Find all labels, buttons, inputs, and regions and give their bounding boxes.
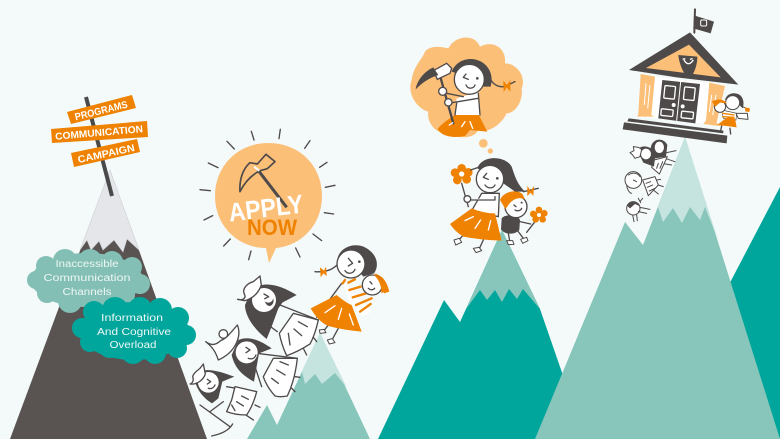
small girl top — [651, 140, 676, 165]
girl 1 — [238, 276, 318, 356]
mountain: small light teal — [247, 333, 370, 439]
cloud: inaccessible communication channels — [27, 249, 150, 313]
thought bubble — [410, 37, 523, 154]
apply now sun bubble: NOW — [247, 215, 297, 240]
girl 2 — [206, 325, 300, 397]
small climbing girls at school — [625, 140, 676, 222]
legs — [458, 232, 524, 249]
girl with doll and flowers — [450, 158, 548, 253]
doll head — [505, 196, 527, 218]
flag — [693, 9, 714, 33]
apply now sun bubble — [200, 129, 335, 263]
door — [658, 80, 700, 123]
girl 3 with pickaxe — [190, 364, 260, 436]
body — [472, 193, 499, 217]
small girl second with hat — [630, 146, 667, 174]
sign: campaign: CAMPAIGN — [77, 143, 136, 166]
small girl bottom — [627, 198, 650, 222]
cloud: inaccessible communication channels: Channels — [62, 287, 112, 298]
doll body — [501, 215, 520, 234]
cloud: information and cognitive overload: And Cognitive — [97, 327, 172, 338]
thought dots — [479, 139, 488, 148]
orange girl with doll at school — [712, 93, 750, 134]
cloud: inaccessible communication channels: Communication — [44, 273, 130, 284]
icon: pickaxe — [240, 154, 287, 207]
columns — [637, 74, 655, 117]
flower left — [451, 164, 473, 207]
girl with pickaxe — [416, 59, 515, 137]
mountain: tall light teal — [535, 137, 780, 439]
orange girl with doll — [311, 245, 389, 344]
sign: programs: PROGRAMS — [74, 100, 129, 123]
school building — [623, 9, 738, 143]
small girl middle — [625, 172, 663, 196]
shield — [678, 55, 697, 79]
steps — [627, 118, 723, 133]
mountain: right background teal — [700, 187, 780, 439]
skirt — [450, 208, 502, 241]
cloud: information and cognitive overload: Overload — [110, 340, 156, 351]
head — [477, 158, 525, 192]
sun rays — [200, 129, 335, 260]
cloud: information and cognitive overload — [72, 297, 196, 364]
flower right — [530, 207, 548, 223]
sign: communication: COMMUNICATION — [55, 124, 143, 143]
sign post with three signs — [51, 95, 148, 196]
bubble — [215, 143, 322, 263]
blob — [410, 37, 523, 137]
text: apply now: APPLY — [227, 189, 305, 228]
roof — [629, 32, 738, 85]
mountain: dark with snow — [10, 170, 207, 439]
climbing girls — [190, 276, 318, 436]
mountain: teal with cap — [378, 230, 585, 439]
walls — [638, 75, 723, 125]
cloud: inaccessible communication channels: Inaccessible — [56, 259, 119, 270]
cloud: information and cognitive overload: Information — [101, 313, 163, 324]
